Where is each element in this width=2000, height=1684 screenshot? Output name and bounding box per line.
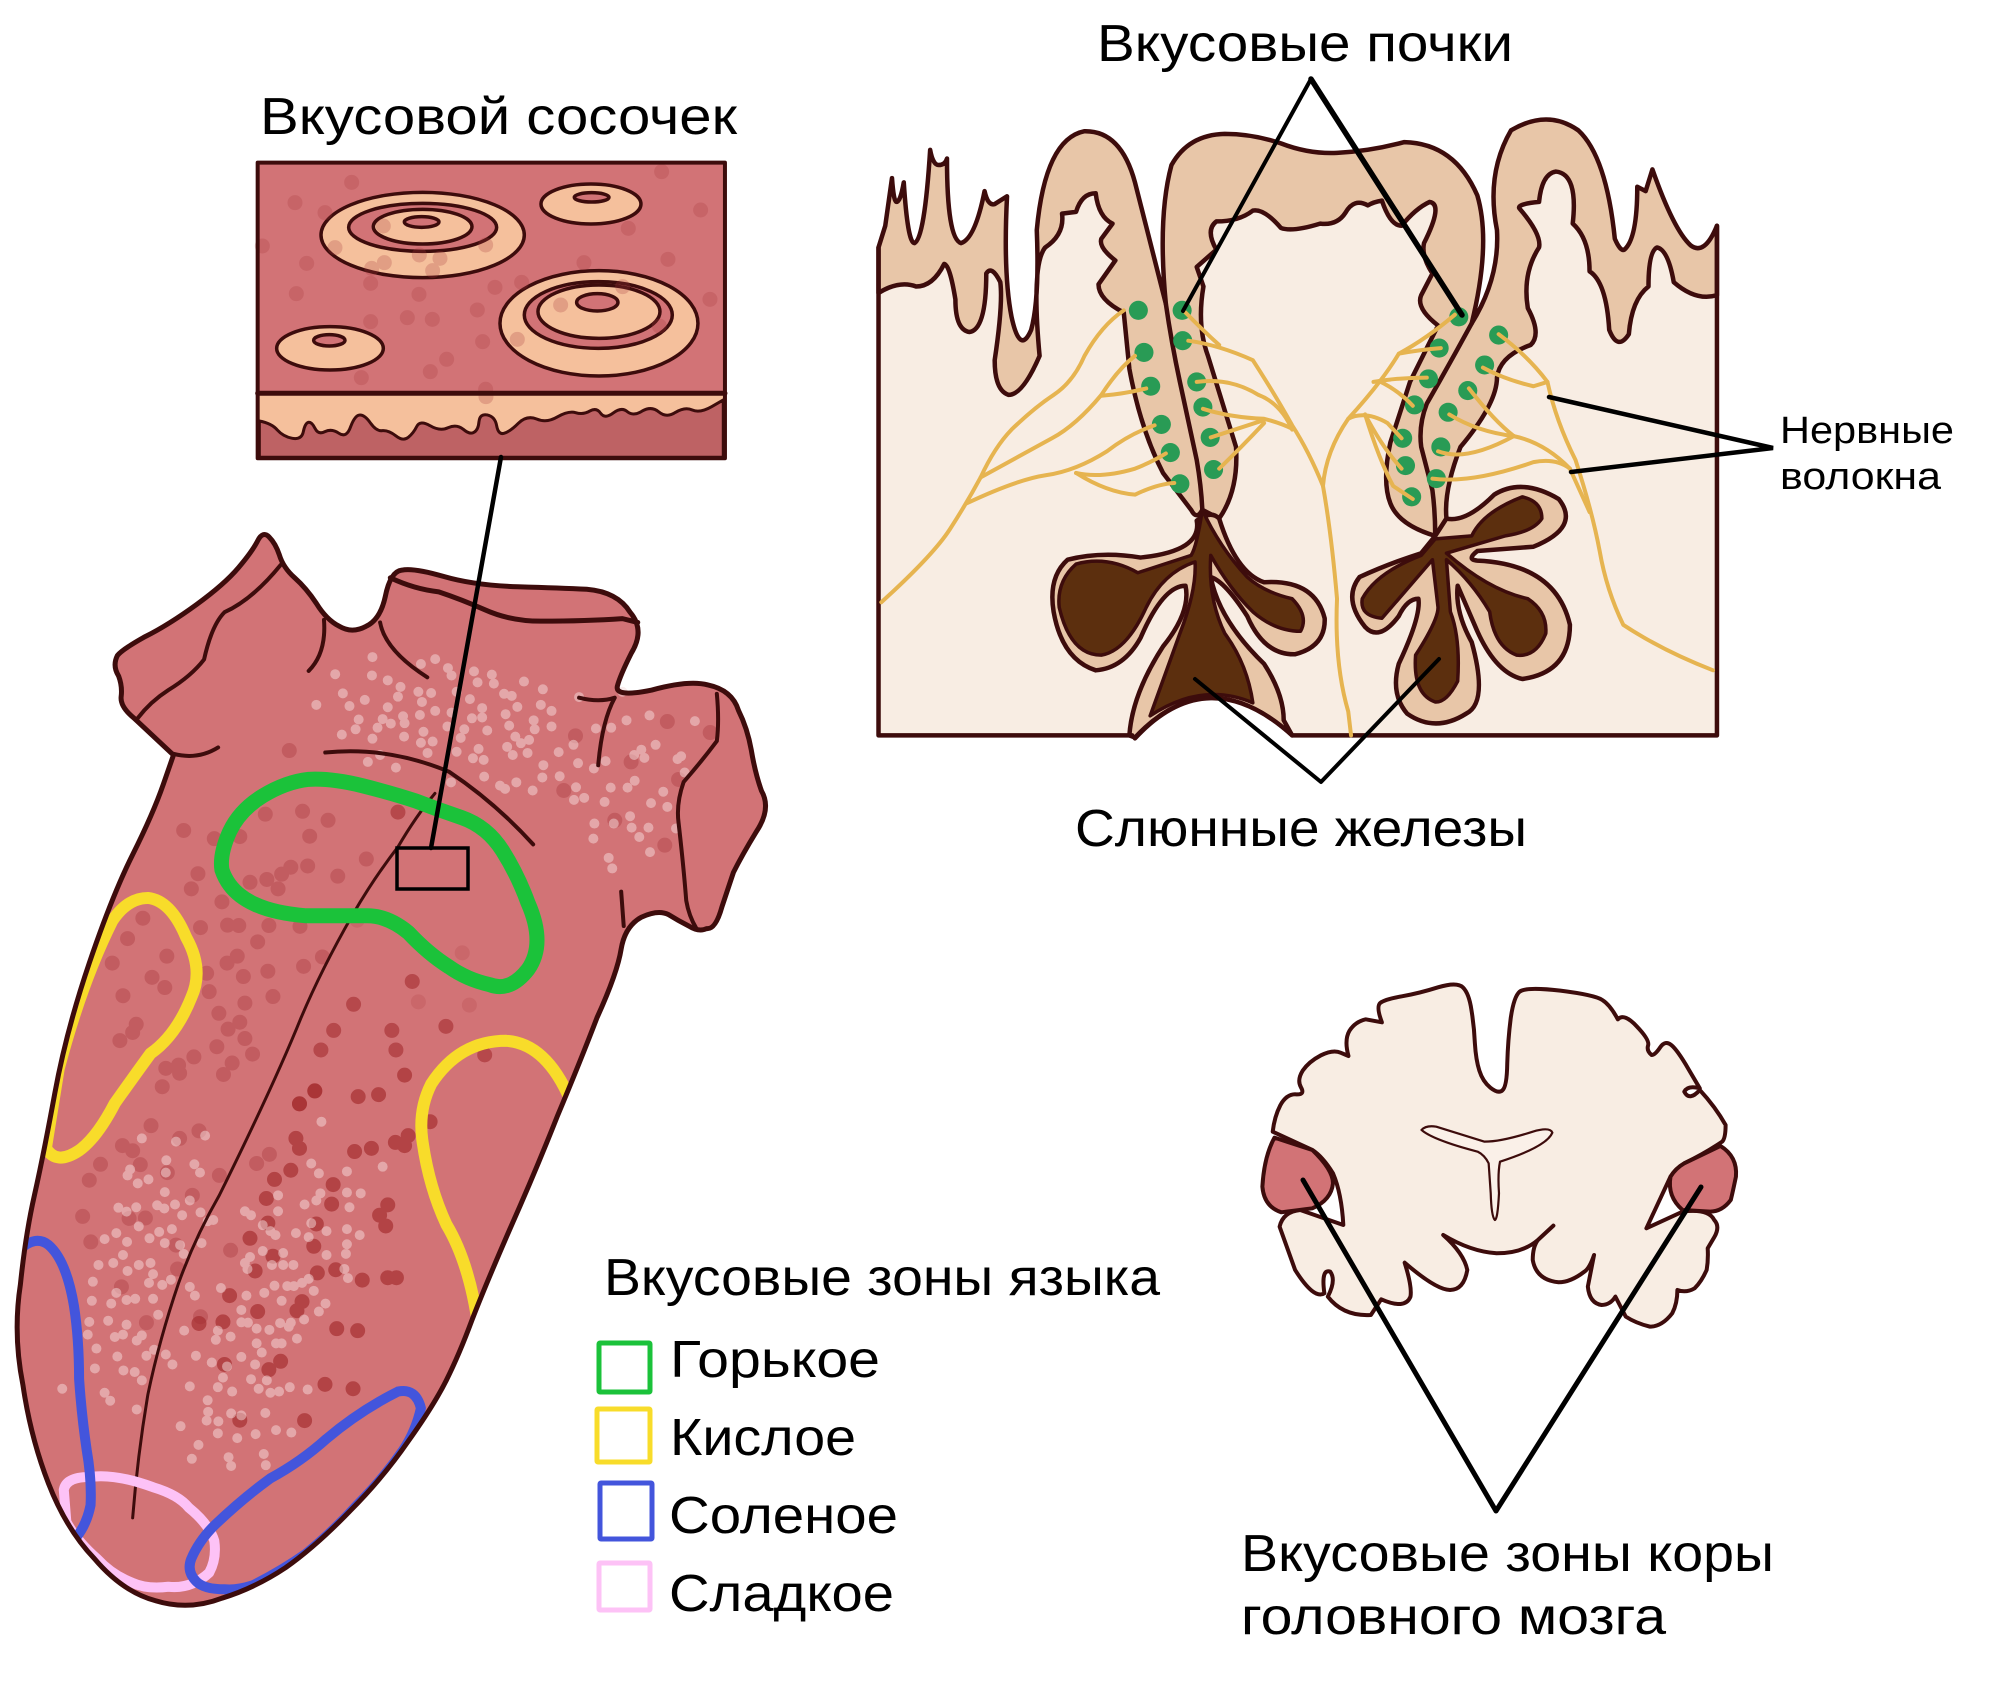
small papilla left (277, 327, 383, 370)
label: nerve fibres with pointers: Нервные (1780, 410, 1954, 452)
notch below left gland (1135, 699, 1292, 738)
inset frame (258, 163, 725, 458)
legend item: sour (597, 1409, 856, 1467)
heading: taste papilla: Вкусовой сосочек (260, 88, 737, 146)
epithelium with arches (879, 120, 1717, 536)
lower layer band (259, 394, 723, 457)
large papilla left (321, 192, 524, 278)
large papilla right (500, 271, 698, 376)
papillae cross-section diagram (879, 120, 1717, 738)
left gustatory cortex (1262, 1138, 1333, 1212)
legend item: bitter (599, 1331, 880, 1392)
heading: taste buds with pointers (1097, 15, 1513, 315)
taste bud dots: upper tongue (112, 657, 710, 1104)
left salivary gland (1052, 510, 1325, 738)
legend title: Вкусовые зоны языка (604, 1249, 1160, 1307)
legend item: sweet: Сладкое (669, 1565, 894, 1623)
legend item: salty (600, 1483, 898, 1545)
small papilla top (541, 184, 641, 224)
taste bud dots: lower tongue (62, 1075, 430, 1466)
inset background (258, 163, 725, 458)
sour zone left outline (46, 898, 197, 1158)
salty zone right outline (190, 1391, 421, 1590)
sour zone right outline (421, 1041, 570, 1327)
inset: taste papilla close-up (258, 163, 725, 458)
legend: taste zones (597, 1249, 1160, 1623)
label: cortical taste zones with pointers: головного мозга (1241, 1588, 1666, 1646)
label: nerve fibres with pointers (1549, 397, 1954, 498)
tongue body (17, 535, 766, 1605)
tongue contour (17, 535, 766, 1605)
right salivary gland (1352, 487, 1570, 723)
taste buds (1129, 301, 1508, 506)
label: salivary glands with pointers (1075, 659, 1527, 858)
trench lines (1166, 304, 1472, 536)
brain cross-section (1262, 984, 1736, 1327)
legend item: salty: Соленое (669, 1487, 898, 1545)
wavy tissue layer (259, 400, 723, 457)
right gustatory cortex (1670, 1146, 1736, 1212)
ventricle (1421, 1126, 1552, 1220)
connective tissue background (879, 169, 1717, 735)
heading: taste buds with pointers: Вкусовые почки (1097, 15, 1513, 73)
brain outline (1273, 984, 1726, 1327)
label: cortical taste zones with pointers (1241, 1180, 1774, 1646)
nerve fibres (881, 310, 1713, 735)
bitter zone outline (221, 779, 537, 987)
tongue creases and midline (133, 565, 718, 1518)
legend item: sweet (599, 1563, 894, 1623)
legend item: sour: Кислое (670, 1409, 856, 1467)
callout: inset pointer and sample box (397, 457, 501, 889)
inset dots (262, 172, 710, 397)
label: nerve fibres with pointers: волокна (1780, 456, 1942, 498)
label: salivary glands with pointers: Слюнные железы (1075, 800, 1527, 858)
label: cortical taste zones with pointers: Вкусовые зоны коры (1241, 1525, 1774, 1583)
legend item: bitter: Горькое (670, 1331, 880, 1389)
sweet zone outline (64, 1476, 215, 1587)
salty zone left outline (19, 1241, 91, 1537)
tongue illustration (17, 535, 766, 1605)
section base and side edges (879, 226, 1717, 738)
